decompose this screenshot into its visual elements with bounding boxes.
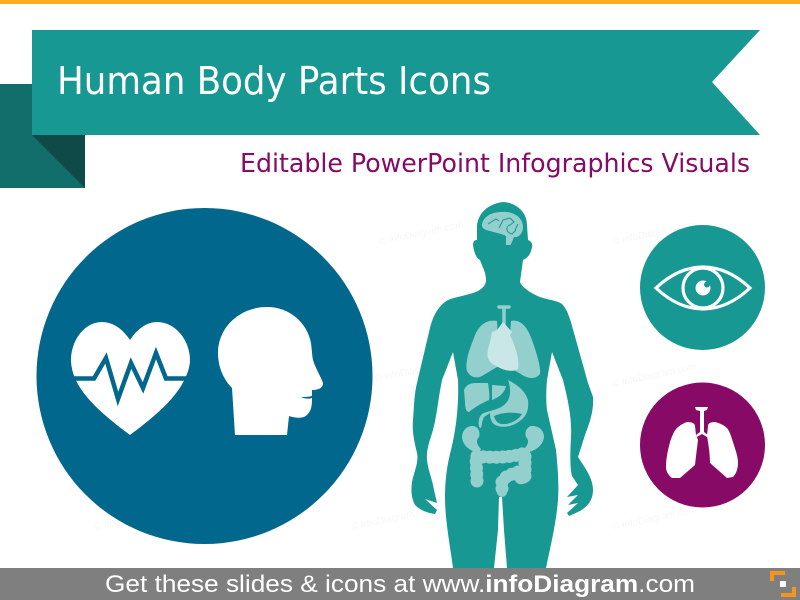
title: Human Body Parts Icons — [57, 59, 491, 103]
organ: colon — [476, 453, 525, 492]
organ: stomach inner lens — [494, 413, 522, 424]
icon: infoDiagram logo — [770, 571, 796, 597]
icon: head profile — [218, 307, 323, 435]
footer bar — [0, 568, 800, 600]
panel: large circle with heart and head — [36, 208, 372, 544]
ribbon fold — [0, 84, 85, 188]
title banner — [32, 30, 760, 135]
watermarks: © infoDiagram.com — [611, 361, 697, 390]
organ: right kidney — [524, 426, 544, 452]
watermarks: © infoDiagram.com — [350, 504, 436, 533]
subtitle: Editable PowerPoint Infographics Visuals — [240, 149, 750, 179]
organ: stomach — [479, 380, 528, 428]
footer text: Get these slides & icons at www. infoDiagram .com — [105, 571, 695, 598]
panel: lungs circle — [640, 382, 765, 508]
organ: brain — [482, 212, 523, 245]
icon: eye — [656, 267, 750, 309]
watermarks: © infoDiagram.com — [611, 504, 697, 533]
watermarks: © infoDiagram.com — [378, 219, 464, 248]
panel: human body — [411, 202, 593, 568]
watermarks — [93, 219, 697, 533]
organ: lungs — [466, 321, 540, 378]
top accent bar — [0, 0, 800, 4]
panel: eye circle — [640, 225, 765, 350]
watermarks: © infoDiagram.com — [93, 504, 179, 533]
organ: liver — [464, 383, 506, 412]
icon: lungs — [666, 407, 738, 478]
organ: trachea — [499, 307, 509, 326]
organ: left kidney — [462, 426, 481, 452]
icon: heart with pulse — [71, 322, 190, 435]
body silhouette — [411, 202, 593, 568]
watermarks: © infoDiagram.com — [611, 219, 697, 248]
watermarks: © infoDiagram.com — [373, 356, 459, 385]
organ: heart — [487, 322, 518, 371]
